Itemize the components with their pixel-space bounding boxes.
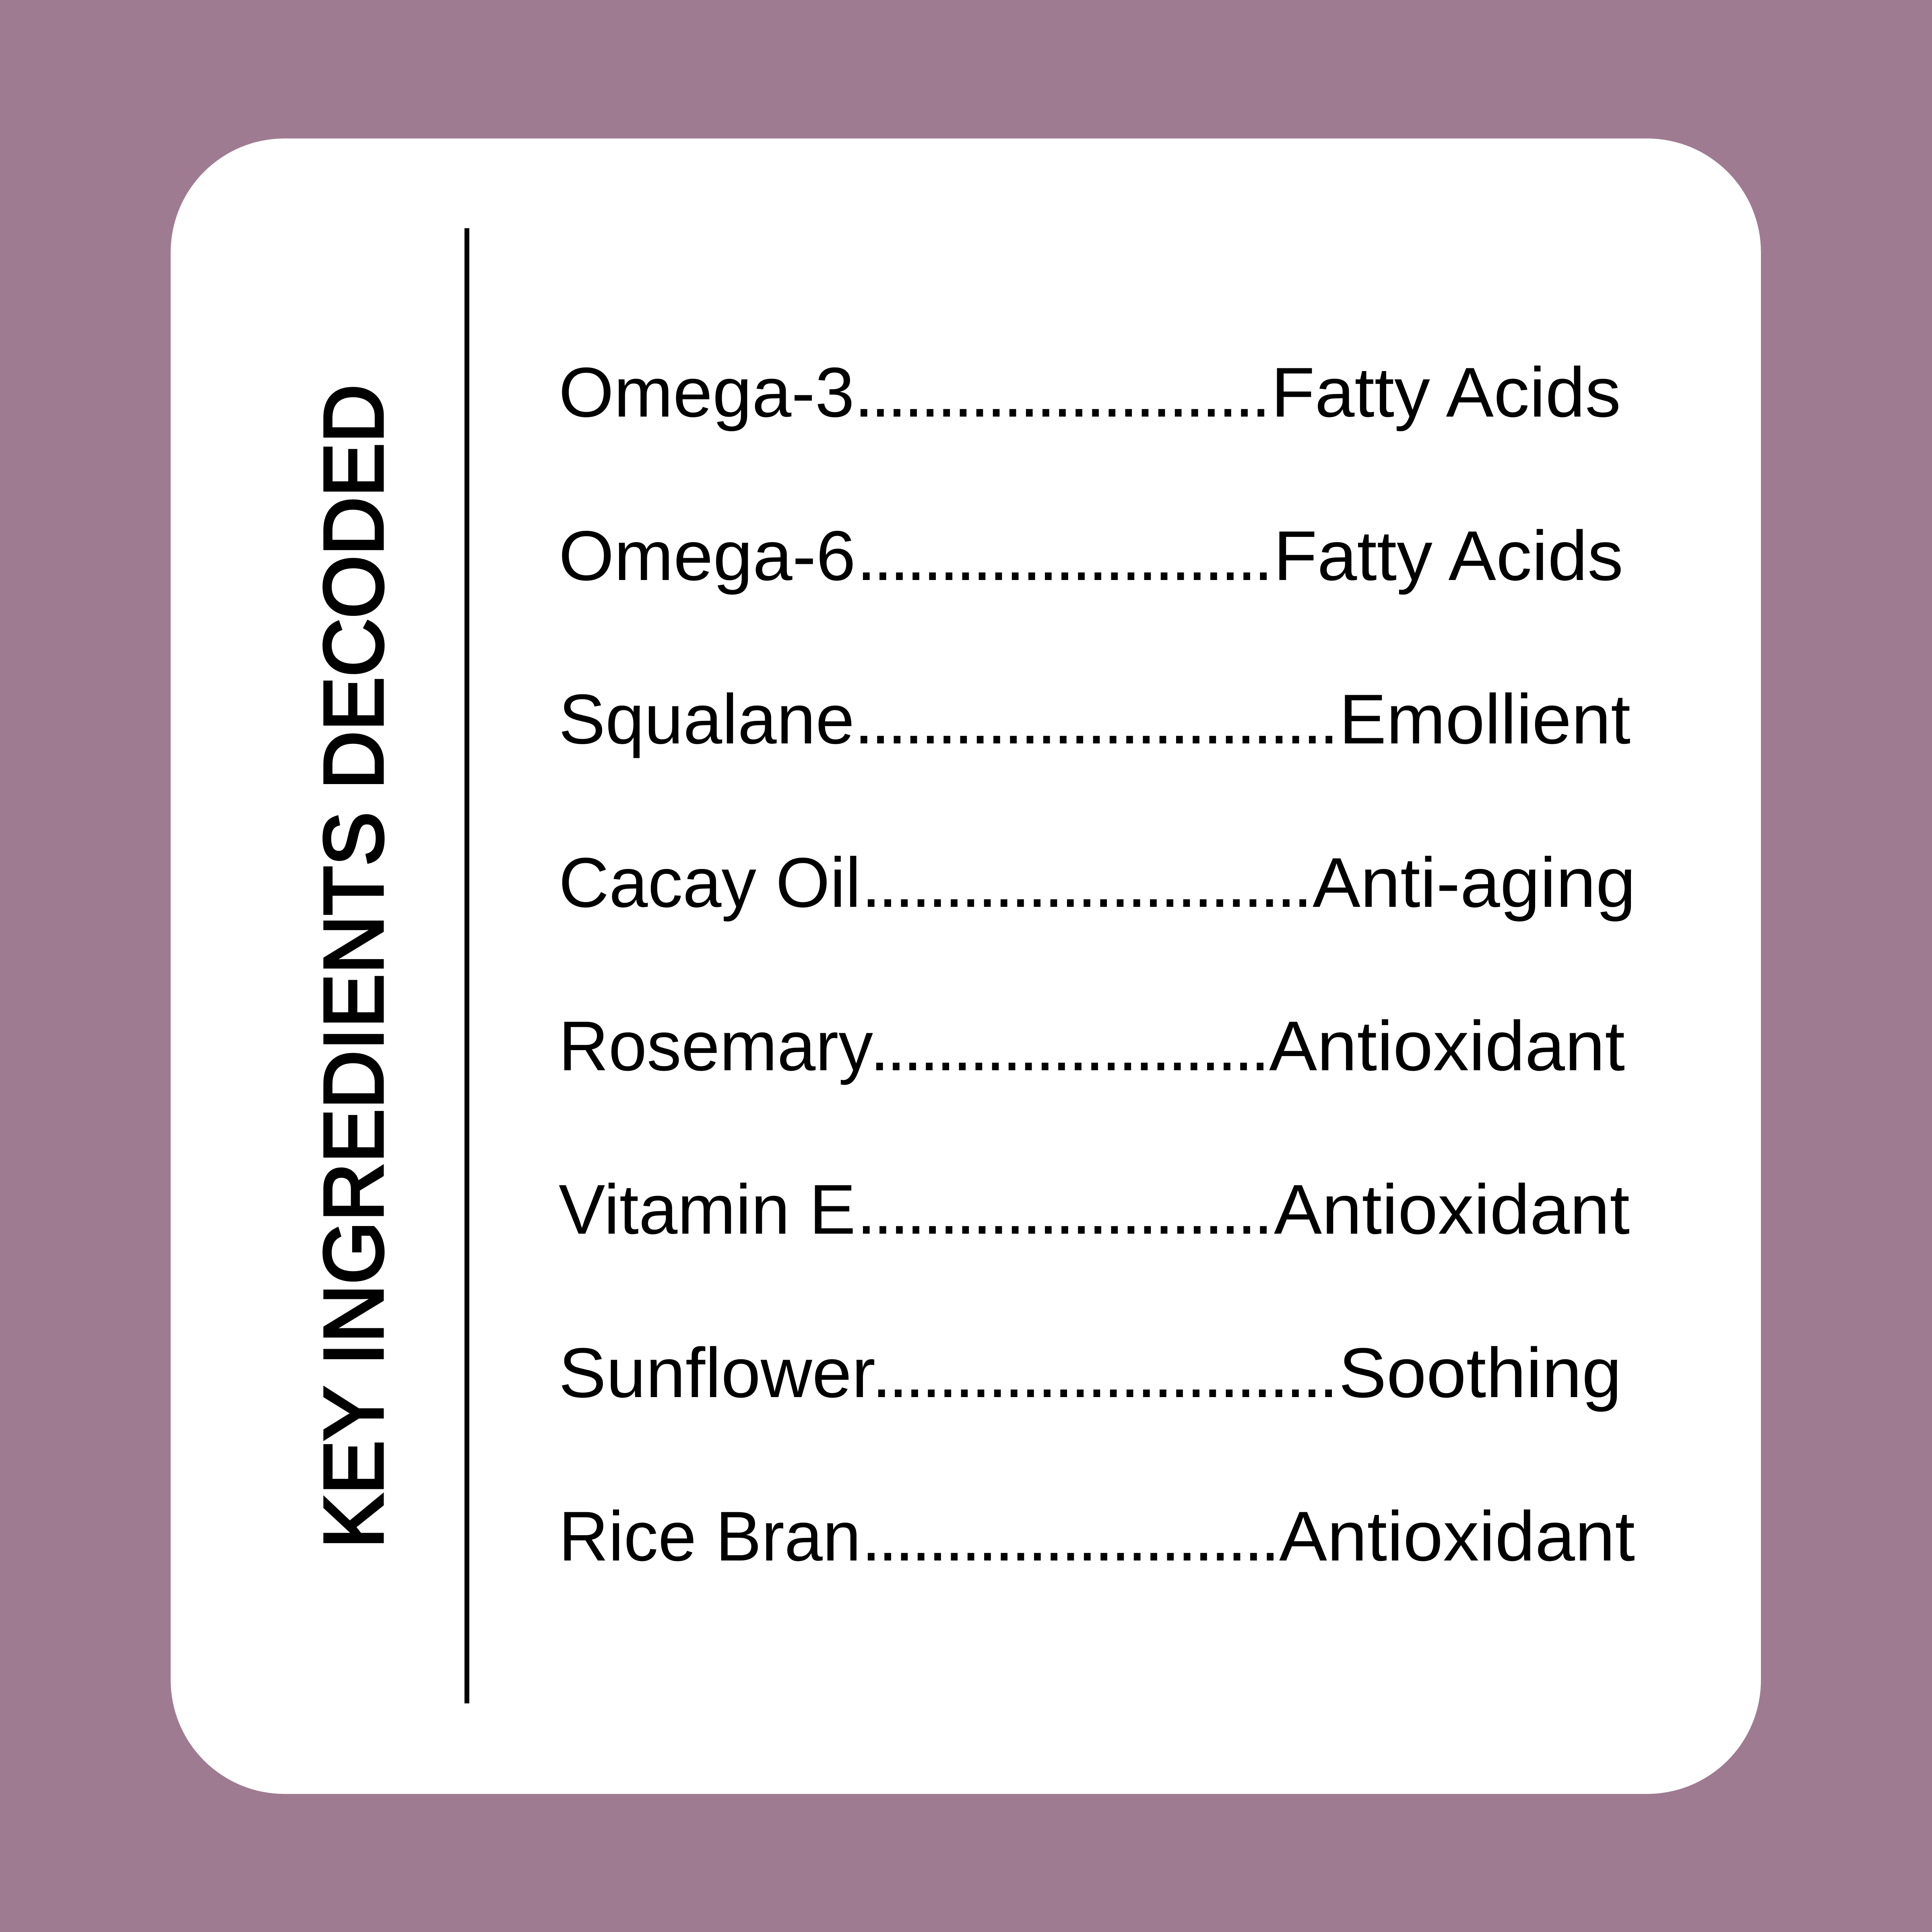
row: Cacay Oil: Cacay Oil (559, 844, 861, 922)
panel: white card (171, 138, 1761, 1794)
row: Rice Bran: ......................... (861, 1497, 1280, 1576)
row: Omega-3 (559, 353, 1621, 432)
row: Omega-3: Fatty Acids (1271, 353, 1621, 432)
row: Rosemary: ........................ (870, 1007, 1270, 1086)
row: Omega-3: Omega-3 (559, 353, 855, 432)
vertical divider line (464, 228, 469, 1703)
row: Cacay Oil: Anti-aging (1313, 844, 1636, 922)
row: Vitamin E: Vitamin E (559, 1170, 856, 1249)
row: Sunflower: ............................ (872, 1334, 1338, 1412)
row: Rice Bran: Antioxidant (1279, 1497, 1635, 1576)
row: Sunflower (559, 1334, 1622, 1412)
row: Cacay Oil (559, 844, 1636, 922)
row: Vitamin E (559, 1170, 1630, 1249)
row: Vitamin E: ......................... (857, 1170, 1273, 1249)
row: Omega-6: Omega-6 (559, 517, 856, 595)
row: Squalane (559, 680, 1631, 759)
row: Omega-3: ......................... (854, 353, 1271, 432)
row: Cacay Oil: ........................... (861, 844, 1313, 922)
row: Rice Bran (559, 1497, 1635, 1576)
row: Sunflower: Soothing (1339, 1334, 1622, 1412)
title: key ingredients decoded: KEY INGREDIENTS DECODED (307, 384, 400, 1548)
row: Vitamin E: Antioxidant (1274, 1170, 1630, 1249)
row: Squalane: Squalane (559, 680, 855, 759)
row: Rosemary (559, 1007, 1625, 1086)
ingredient list (559, 353, 1636, 1576)
row: Squalane: ............................. (854, 680, 1339, 759)
row: Rosemary: Rosemary (559, 1007, 873, 1086)
row: Omega-6 (559, 517, 1623, 595)
row: Rosemary: Antioxidant (1269, 1007, 1625, 1086)
row: Omega-6: ......................... (857, 517, 1273, 595)
row: Squalane: Emollient (1339, 680, 1631, 759)
row: Sunflower: Sunflower (559, 1334, 875, 1412)
row: Omega-6: Fatty Acids (1274, 517, 1623, 595)
row: Rice Bran: Rice Bran (559, 1497, 861, 1576)
